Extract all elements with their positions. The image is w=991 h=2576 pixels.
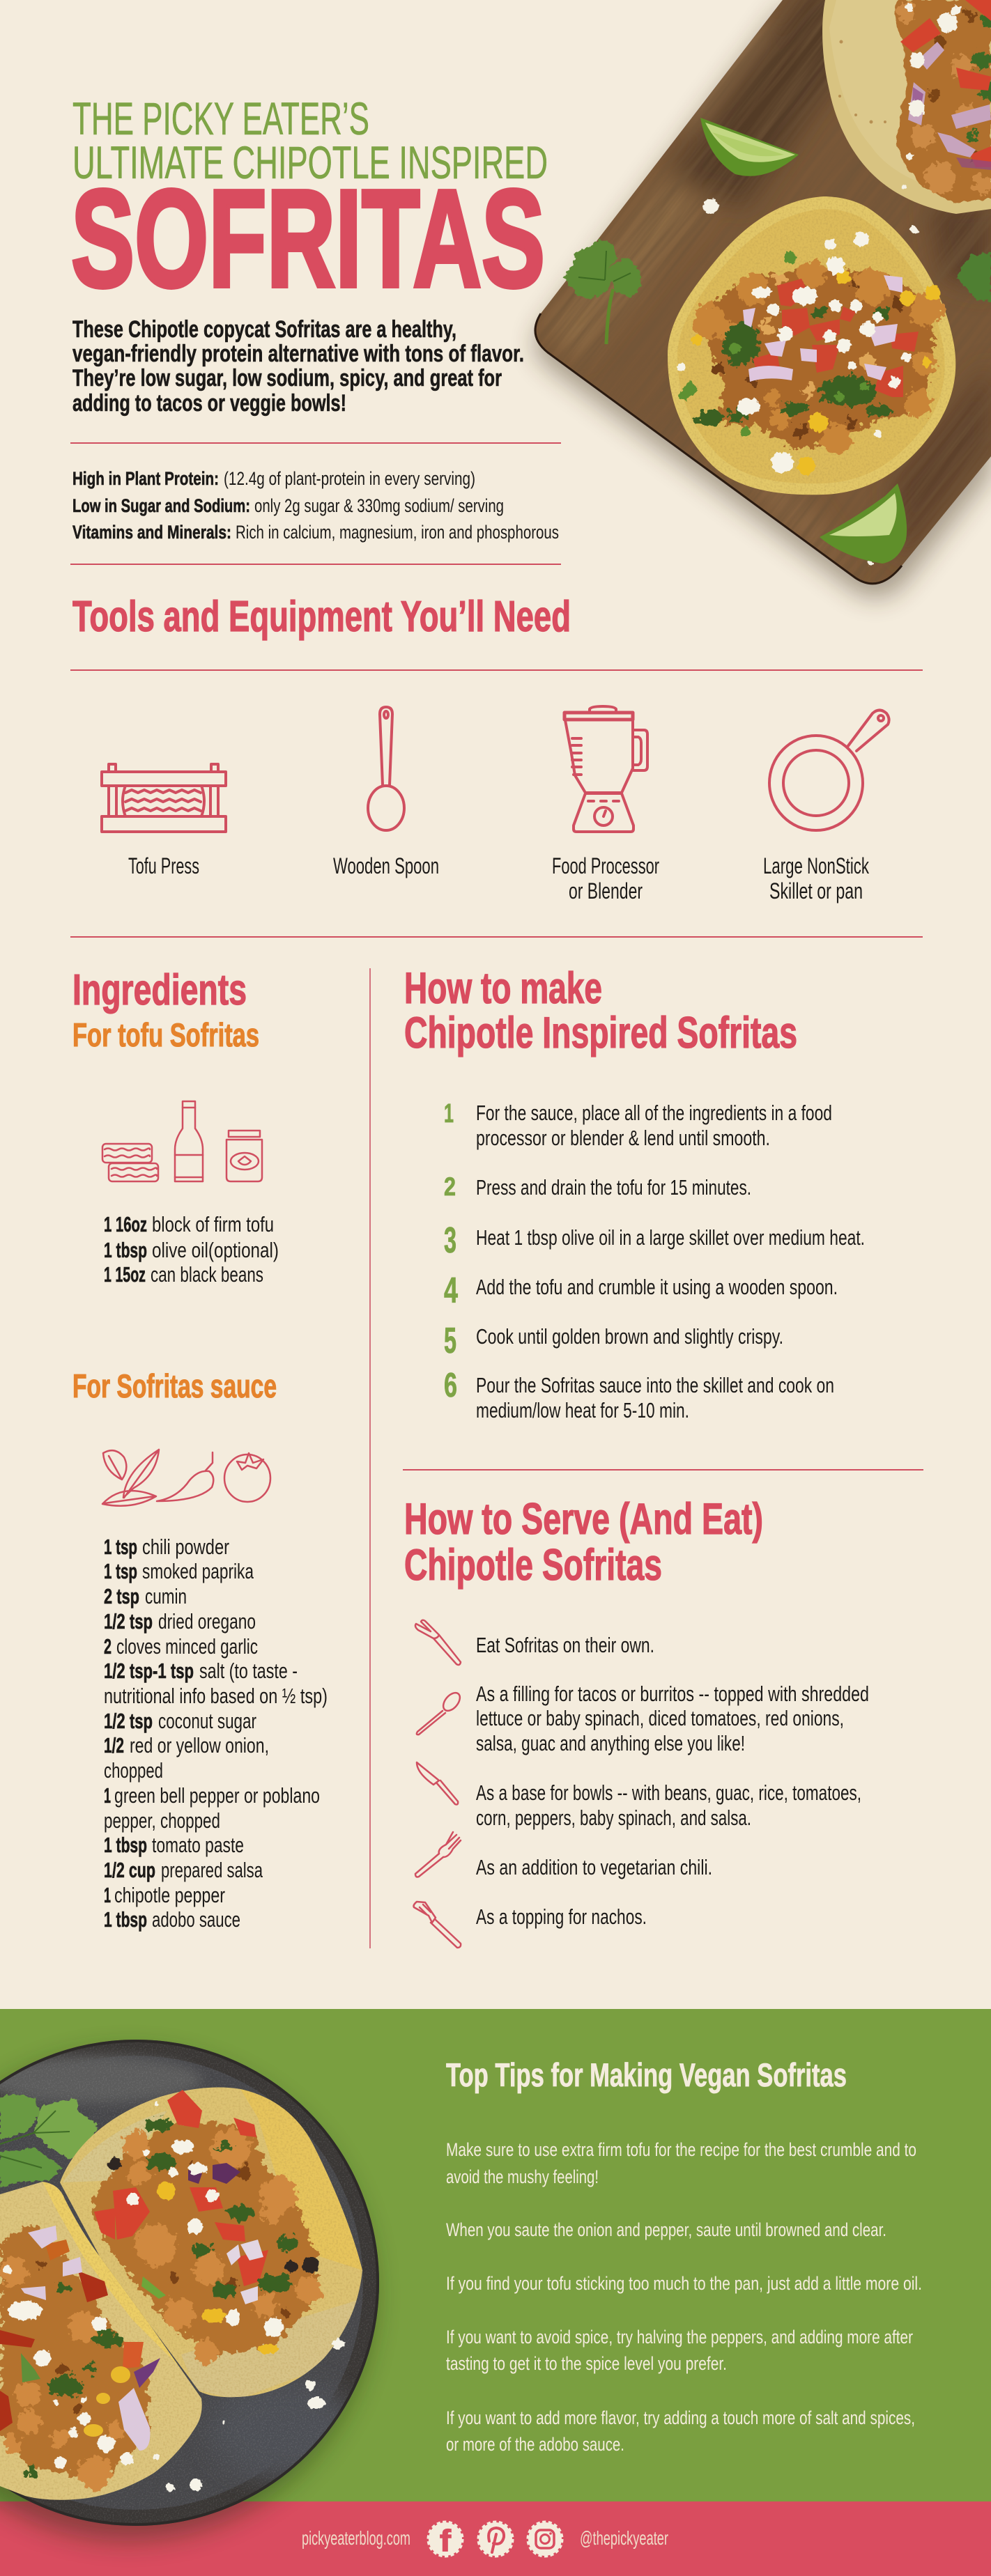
serving item text: corn, peppers, baby spinach, and salsa. <box>476 1806 751 1830</box>
ingredient list: sauce: green bell pepper or poblano <box>114 1783 320 1808</box>
panel: how to serve <box>404 1495 869 1948</box>
icon: spoon <box>417 1690 463 1735</box>
icon: blender <box>564 706 647 832</box>
panel: top tips (green) <box>0 2009 991 2501</box>
label: large nonstick skillet or pan: Skillet or pan <box>769 878 863 903</box>
ingredient list: tofu: 1 16oz <box>104 1212 147 1236</box>
heading: tools and equipment: Tools and Equipment You’ll Need <box>72 593 571 641</box>
icon: bean can <box>226 1131 262 1181</box>
intro paragraph: They’re low sugar, low sodium, spicy, and great for <box>72 365 502 391</box>
step numbers <box>444 1099 458 1404</box>
ingredient list: sauce: 1 <box>104 1883 111 1907</box>
title: sofritas: SOFRITAS <box>71 162 545 316</box>
intro paragraph <box>72 316 524 417</box>
heading: for tofu sofritas: For tofu Sofritas <box>72 1016 259 1053</box>
ingredient list: tofu: 1 15oz <box>104 1262 146 1287</box>
lime wedge: bottom <box>820 483 907 564</box>
title block <box>71 93 548 316</box>
ingredient list: sauce: chipotle pepper <box>114 1883 225 1907</box>
serving item text: lettuce or baby spinach, diced tomatoes, red onions, <box>476 1706 844 1730</box>
wooden board <box>537 0 991 582</box>
heading: how to serve: How to Serve (And Eat) <box>404 1495 763 1544</box>
lime wedge: top <box>700 118 799 176</box>
ingredient list: sauce: 2 <box>104 1634 112 1659</box>
intro paragraph: adding to tacos or veggie bowls! <box>72 390 346 417</box>
footer: handle: @thepickyeater <box>580 2527 668 2549</box>
intro paragraph: vegan-friendly protein alternative with tons of flavor. <box>72 341 524 367</box>
icon: tofu blocks <box>102 1144 158 1181</box>
plate <box>0 2034 383 2529</box>
nutrition highlights: High in Plant Protein: <box>72 468 219 489</box>
tips text: or more of the adobo sauce. <box>446 2434 624 2455</box>
step text: For the sauce, place all of the ingredients in a food <box>476 1101 832 1125</box>
ingredient list: sauce: 1/2 tsp <box>104 1709 153 1733</box>
heading: top tips: Top Tips for Making Vegan Sofritas <box>446 2056 847 2093</box>
icon: tomato <box>224 1453 270 1502</box>
nutrition highlights: Vitamins and Minerals: <box>72 522 231 543</box>
icon: pinterest badge <box>479 2522 512 2556</box>
cilantro sprig <box>564 239 641 344</box>
taco: left <box>0 2180 209 2501</box>
ingredient list: tofu: 1 tbsp <box>104 1238 147 1262</box>
ingredient list: sauce: chili powder <box>142 1535 229 1559</box>
ingredient list: sauce: smoked paprika <box>142 1559 254 1583</box>
step numbers: 2 <box>444 1172 456 1201</box>
heading: how to make: Chipotle Inspired Sofritas <box>404 1009 797 1057</box>
serving item text: As a base for bowls -- with beans, guac, rice, tomatoes, <box>476 1780 861 1805</box>
footer bar <box>0 2501 991 2576</box>
serving item text <box>476 1633 869 1929</box>
board shadow <box>535 7 991 598</box>
step numbers: 1 <box>444 1099 454 1128</box>
icon: instagram badge <box>528 2522 562 2556</box>
tips text: avoid the mushy feeling! <box>446 2166 599 2187</box>
step text: Press and drain the tofu for 15 minutes. <box>476 1175 751 1200</box>
board dark edge <box>535 313 902 584</box>
ingredient list: sauce: 1 <box>104 1783 111 1808</box>
heading: ingredients: Ingredients <box>72 966 247 1014</box>
nutrition highlights: (12.4g of plant-protein in every serving) <box>224 468 475 489</box>
icon: chili pepper <box>157 1452 213 1501</box>
icon: facebook badge <box>429 2522 462 2558</box>
label: food processor or blender <box>552 853 659 903</box>
ingredient list: tofu: block of firm tofu <box>152 1212 274 1236</box>
nutrition highlights: only 2g sugar & 330mg sodium/ serving <box>254 495 504 516</box>
step text: processor or blender & lend until smooth. <box>476 1126 770 1150</box>
heading: how to make: How to make <box>404 964 602 1013</box>
ingredient list: sauce: 1/2 cup <box>104 1858 155 1882</box>
step text: Pour the Sofritas sauce into the skillet and cook on <box>476 1373 834 1397</box>
serving item text: salsa, guac and anything else you like! <box>476 1731 745 1755</box>
panel: tools <box>102 706 889 903</box>
cilantro on plate <box>0 2094 98 2187</box>
feta crumbs on board <box>703 199 919 565</box>
step numbers: 6 <box>444 1367 457 1404</box>
ingredient list: sauce: nutritional info based on ½ tsp) <box>104 1684 328 1708</box>
label: large nonstick skillet or pan <box>763 853 870 903</box>
heading: how to make <box>404 964 797 1057</box>
tips text: tasting to get it to the spice level you prefer. <box>446 2353 727 2374</box>
photo: tacos on wooden board <box>521 0 991 612</box>
label: food processor or blender: or Blender <box>569 878 643 903</box>
taco: right <box>56 2083 369 2403</box>
step text <box>476 1101 865 1422</box>
footer: website: pickyeaterblog.com <box>302 2527 410 2549</box>
icon: carving fork <box>415 1620 461 1665</box>
serving item text: As a topping for nachos. <box>476 1904 647 1929</box>
ingredient list: sauce: 1 tbsp <box>104 1833 147 1857</box>
icon: spatula <box>414 1902 461 1948</box>
step numbers: 4 <box>444 1271 458 1311</box>
icon: tofu press <box>102 764 226 832</box>
heading: for sofritas sauce: For Sofritas sauce <box>72 1367 277 1404</box>
icon: oil bottle <box>175 1101 203 1181</box>
serving item text: As a filling for tacos or burritos -- topped with shredded <box>476 1682 869 1706</box>
step text: Cook until golden brown and slightly crispy. <box>476 1324 783 1349</box>
icon: wooden spoon <box>368 707 404 830</box>
ingredient list: tofu: olive oil(optional) <box>152 1238 279 1262</box>
icon: fork <box>415 1832 461 1877</box>
ingredient list: sauce: 1 tbsp <box>104 1907 147 1932</box>
ingredient list: tofu: can black beans <box>151 1262 263 1287</box>
icon: skillet <box>769 711 889 830</box>
serving item text: Eat Sofritas on their own. <box>476 1633 654 1657</box>
heading: how to serve <box>404 1495 763 1590</box>
taco: upper right <box>822 0 991 214</box>
ingredient list: sauce <box>104 1535 328 1932</box>
panel: ingredients <box>72 966 328 1932</box>
ingredient list: sauce: 1 tsp <box>104 1535 137 1559</box>
step numbers: 3 <box>444 1220 456 1261</box>
icon: herb leaves <box>102 1450 159 1506</box>
title: the picky eater's: THE PICKY EATER’S <box>72 93 369 144</box>
intro paragraph: These Chipotle copycat Sofritas are a healthy, <box>72 316 456 343</box>
step text: medium/low heat for 5-10 min. <box>476 1398 689 1422</box>
ingredient list: sauce: 1 tsp <box>104 1559 137 1583</box>
heading: how to serve: Chipotle Sofritas <box>404 1541 662 1590</box>
ingredient list: sauce: 1/2 <box>104 1733 124 1758</box>
title: ultimate chipotle inspired: ULTIMATE CHIPOTLE INSPIRED <box>72 137 548 188</box>
nutrition highlights: Rich in calcium, magnesium, iron and phosphorous <box>236 522 559 543</box>
label: large nonstick skillet or pan: Large NonStick <box>763 853 870 878</box>
label: wooden spoon: Wooden Spoon <box>333 853 439 878</box>
nutrition highlights: Low in Sugar and Sodium: <box>72 495 250 516</box>
nutrition highlights <box>72 468 559 543</box>
ingredient list: sauce: pepper, chopped <box>104 1808 220 1833</box>
plate shadow <box>0 2051 374 2541</box>
feta crumbs on plate <box>166 2338 344 2492</box>
ingredient list: sauce: coconut sugar <box>158 1709 256 1733</box>
ingredient list: sauce: red or yellow onion, <box>130 1733 269 1758</box>
ingredient list: sauce: 1/2 tsp-1 tsp <box>104 1659 194 1683</box>
serving item text: As an addition to vegetarian chili. <box>476 1855 712 1879</box>
ingredient list: sauce: adobo sauce <box>152 1907 240 1932</box>
panel: how to make <box>404 964 865 1422</box>
ingredient list: sauce: cumin <box>145 1584 187 1608</box>
ingredient list: sauce: salt (to taste - <box>199 1659 298 1683</box>
ingredient list: sauce: dried oregano <box>158 1609 256 1634</box>
label: food processor or blender: Food Processor <box>552 853 659 878</box>
ingredient list: sauce: prepared salsa <box>161 1858 263 1882</box>
ingredient list: sauce: cloves minced garlic <box>116 1634 258 1659</box>
ingredient list: tofu <box>104 1212 279 1287</box>
step text: Add the tofu and crumble it using a wooden spoon. <box>476 1275 838 1299</box>
ingredient list: sauce: 1/2 tsp <box>104 1609 153 1634</box>
ingredient list: sauce: 2 tsp <box>104 1584 139 1608</box>
label: tofu press: Tofu Press <box>128 853 199 878</box>
photo: tacos on dark plate <box>0 2034 383 2541</box>
taco: main tortilla <box>662 195 962 502</box>
icon: facebook badge: f <box>440 2524 451 2558</box>
tips text <box>446 2139 922 2455</box>
icon: knife <box>417 1762 458 1804</box>
step numbers: 5 <box>444 1321 456 1361</box>
ingredient list: sauce: chopped <box>104 1758 163 1783</box>
step text: Heat 1 tbsp olive oil in a large skillet over medium heat. <box>476 1225 865 1250</box>
cilantro: right edge <box>956 252 991 301</box>
ingredient list: sauce: tomato paste <box>152 1833 244 1857</box>
